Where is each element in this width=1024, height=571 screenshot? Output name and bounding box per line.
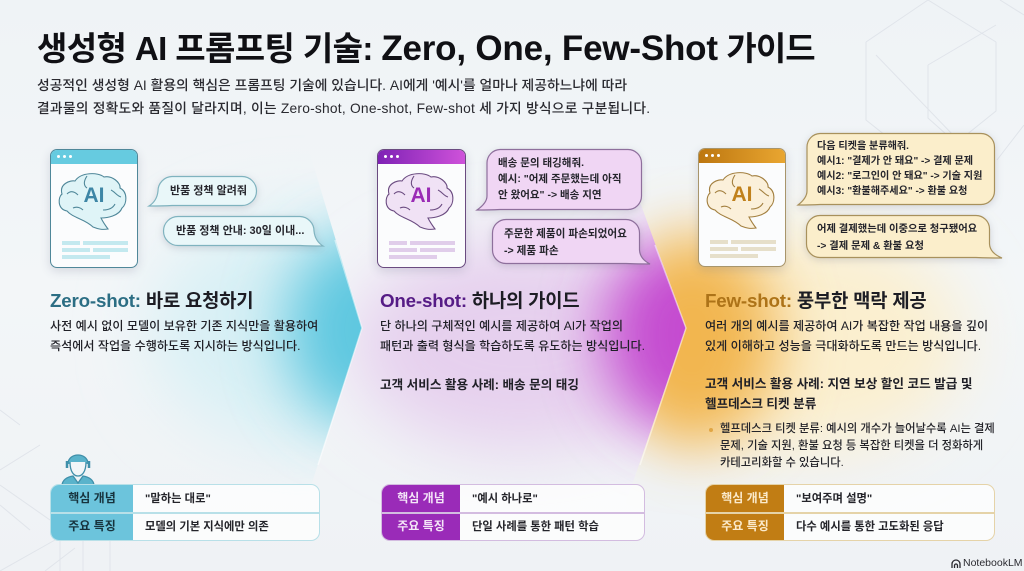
- description: few-shot: 여러 개의 예시를 제공하여 AI가 복잡한 작업 내용을 깊이: [705, 319, 988, 333]
- table: few-shot key concept and feature: 다수 예시를 통한 고도화된 응답: [796, 521, 944, 533]
- intro text: 결과물의 정확도와 품질이 달라지며, 이는 Zero-shot, One-shot, Few-shot 세 가지 방식으로 구분됩니다.: [37, 101, 650, 116]
- speech bubble: one example prompt: 배송 문의 태깅해줘.: [498, 157, 584, 169]
- heading: zero-shot: Zero-shot: 바로 요청하기: [50, 290, 253, 311]
- description: one-shot: [380, 319, 645, 352]
- speech bubble: one-shot response: -> 제품 파손: [504, 245, 559, 257]
- description: one-shot: 패턴과 출력 형식을 학습하도록 유도하는 방식입니다.: [380, 338, 645, 352]
- speech bubble: several examples prompt: 예시1: "결제가 안 돼요" -> 결제 문제: [817, 156, 973, 167]
- table: one-shot key concept and feature: 핵심 개념: [397, 491, 445, 505]
- description: one-shot: 단 하나의 구체적인 예시를 제공하여 AI가 작업의: [380, 319, 623, 333]
- speech bubble: several examples prompt: 예시2: "로그인이 안 돼요" -> 기술 지원: [817, 171, 982, 182]
- icon: AI brain window (orange): AI: [732, 183, 752, 206]
- description: zero-shot: [50, 319, 318, 352]
- use case: few-shot: [705, 377, 972, 411]
- speech bubble: several examples prompt: 예시3: "환불해주세요" -> 환불 요청: [817, 186, 967, 197]
- description: zero-shot: 사전 예시 없이 모델이 보유한 기존 지식만을 활용하여: [50, 319, 318, 333]
- panel: few-shot: [695, 132, 1002, 541]
- bullet dot: [709, 428, 713, 432]
- use case: one-shot: 고객 서비스 활용 사례: 배송 문의 태깅: [380, 378, 579, 392]
- icon: notebook arcs: [951, 559, 961, 568]
- icon: AI brain window (teal): [50, 149, 138, 268]
- speech bubble: one-shot response: [489, 218, 650, 268]
- title: 생성형 AI 프롬프팅 기술: Zero, One, Few-Shot 가이드: [37, 29, 815, 68]
- table: zero-shot key concept and feature: 모델의 기본 지식에만 의존: [145, 521, 269, 533]
- NotebookLM logo: [951, 557, 1023, 569]
- table: zero-shot key concept and feature: 핵심 개념: [68, 491, 116, 505]
- use case: few-shot: 헬프데스크 티켓 분류: [705, 397, 816, 411]
- bullet: helpdesk ticket classification: [709, 422, 995, 469]
- bullet text: [720, 422, 995, 469]
- table: zero-shot key concept and feature: "말하는 대로": [145, 493, 211, 505]
- speech bubble: several examples prompt: 다음 티켓을 분류해줘.: [817, 141, 909, 152]
- speech bubble: user prompt: 반품 정책 알려줘: [170, 185, 247, 197]
- speech bubble: one example prompt: 예시: "어제 주문했는데 아직: [498, 173, 622, 185]
- description: few-shot: [705, 319, 988, 352]
- table: few-shot key concept and feature: "보여주며 설명": [796, 493, 872, 505]
- description: zero-shot: 즉석에서 작업을 수행하도록 지시하는 방식입니다.: [50, 338, 300, 352]
- bullet text: 헬프데스크 티켓 분류: 예시의 개수가 늘어날수록 AI는 결제: [720, 423, 995, 435]
- bullet text: 문제, 기술 지원, 환불 요청 등 복잡한 티켓을 더 정화하게: [720, 440, 983, 452]
- speech bubble: one example prompt: 안 왔어요" -> 배송 지연: [498, 189, 602, 201]
- brand name: NotebookLM: [963, 557, 1023, 569]
- speech bubble: AI response: [160, 215, 325, 251]
- heading: few-shot: Few-shot: 풍부한 맥락 제공: [705, 290, 926, 311]
- icon: AI brain window (purple): AI: [410, 184, 432, 207]
- panel: one-shot: [374, 148, 650, 541]
- table: few-shot key concept and feature: 핵심 개념: [721, 491, 769, 505]
- speech bubble: one-shot response: 주문한 제품이 파손되었어요: [504, 228, 627, 240]
- speech bubble: few-shot response: 어제 결제했는데 이중으로 청구됐어요: [817, 224, 977, 235]
- use case: few-shot: 고객 서비스 활용 사례: 지연 보상 할인 코드 발급 및: [705, 377, 972, 391]
- panel: zero-shot: [47, 149, 325, 541]
- table: few-shot key concept and feature: [705, 484, 995, 541]
- speech bubble: user prompt: [147, 175, 260, 211]
- table: zero-shot key concept and feature: [50, 484, 320, 541]
- icon: AI brain window (orange): [698, 148, 786, 267]
- intro text: [37, 78, 650, 116]
- table: one-shot key concept and feature: 단일 사례를 통한 패턴 학습: [472, 521, 599, 533]
- icon: AI brain window (purple): [377, 149, 466, 268]
- speech bubble: few-shot response: -> 결제 문제 & 환불 요청: [817, 241, 924, 252]
- speech bubble: one example prompt: [475, 148, 645, 215]
- table: one-shot key concept and feature: 주요 특징: [397, 519, 445, 533]
- speech bubble: several examples prompt: [796, 132, 998, 210]
- bullet text: 카테고리화할 수 있습니다.: [720, 457, 844, 469]
- description: few-shot: 있게 이해하고 성능을 극대화하도록 만드는 방식입니다.: [705, 338, 981, 352]
- speech bubble: few-shot response: [803, 214, 1002, 263]
- table: zero-shot key concept and feature: 주요 특징: [68, 519, 116, 533]
- heading: one-shot: One-shot: 하나의 가이드: [380, 290, 579, 311]
- speech bubble: AI response: 반품 정책 안내: 30일 이내...: [176, 225, 304, 237]
- table: one-shot key concept and feature: "예시 하나로": [472, 493, 538, 505]
- icon: customer service agent: [62, 454, 94, 484]
- icon: AI brain window (teal): AI: [84, 184, 104, 207]
- table: one-shot key concept and feature: [381, 484, 645, 541]
- table: few-shot key concept and feature: 주요 특징: [721, 519, 769, 533]
- intro text: 성공적인 생성형 AI 활용의 핵심은 프롬프팅 기술에 있습니다. AI에게 '예시'를 얼마나 제공하느냐에 따라: [37, 78, 627, 93]
